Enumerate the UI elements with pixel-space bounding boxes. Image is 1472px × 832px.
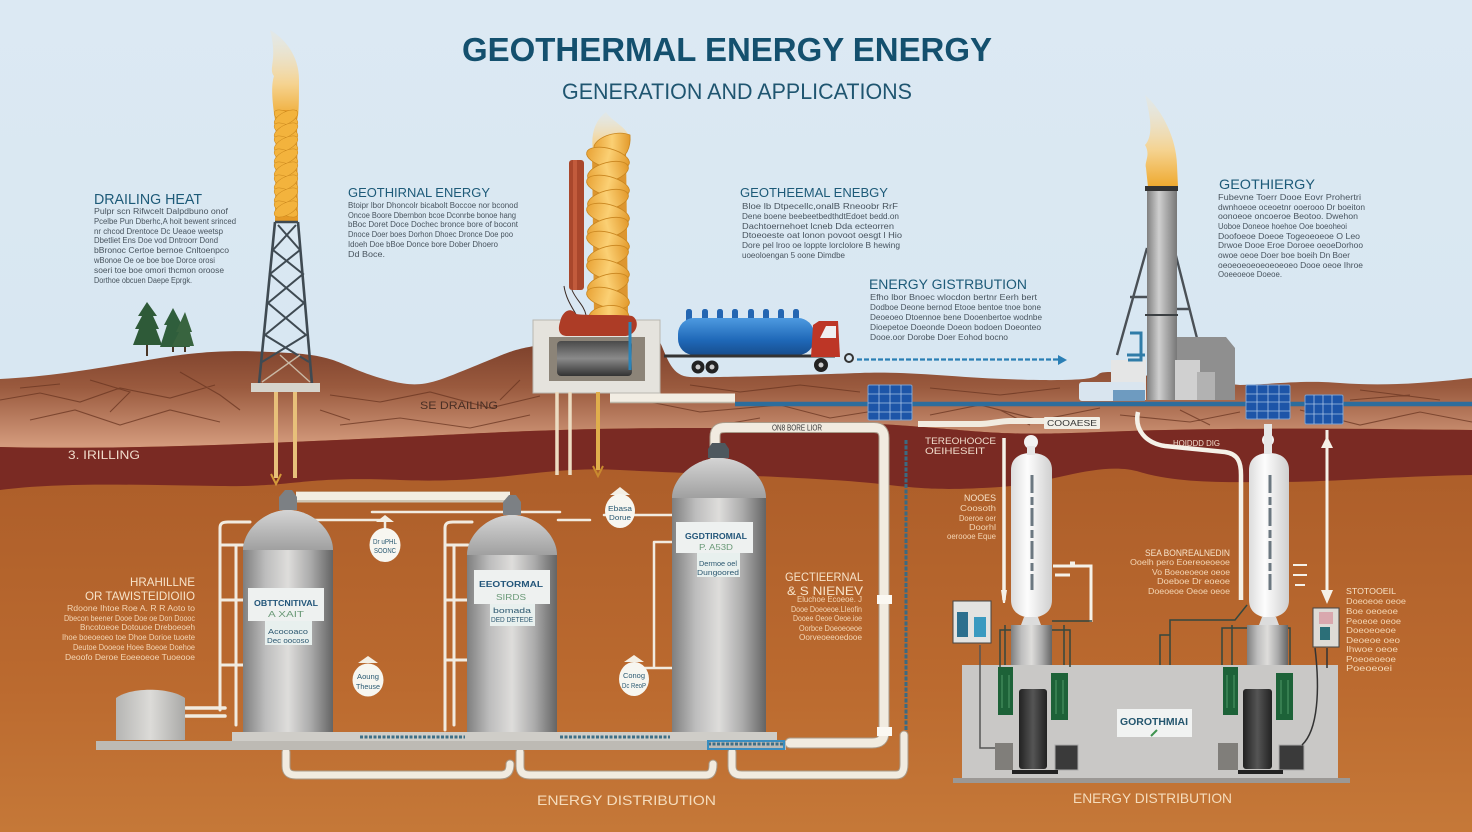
text block: center nodes: SEA BONREALNEDIN [1145, 548, 1230, 558]
text block: geothermal right: oeoeoeoeoeoeoeoeo Dooe oeoe Ihroe [1218, 261, 1364, 270]
round label 3: Dorue [609, 515, 631, 522]
text block: geothermal right [1218, 176, 1365, 279]
tank 3: Dungoored [697, 568, 739, 577]
round label 1: SOONC [374, 548, 396, 555]
tank 1: Acocoaco [268, 627, 308, 636]
text block: geothermal energy 1: Btoipr lbor Dhoncolr bicabolt Boccoe nor bconod [348, 201, 518, 210]
bottom caption left: ENERGY DISTRIBUTION [537, 792, 716, 808]
round label 3 [605, 487, 635, 528]
tank 2: SIRDS [496, 593, 526, 602]
text block: geothermal energy 2: uoeoloengan 5 oone Dimdbe [742, 251, 846, 260]
text block: geothermal energy 1: Idoeh Doe bBoe Donce bore Dober Dhoero [348, 240, 499, 249]
text block: geothermal right: dwnhoeoe oceoetnr ooerooo Dr boeiton [1218, 203, 1365, 212]
text block: energy distribution top [869, 277, 1043, 342]
tank 1: OBTTCNITIVAL [254, 599, 318, 608]
text block: geothermal energy 2: GEOTHEEMAL ENEBGY [740, 185, 888, 200]
tank 1: Dec oocoso [267, 636, 309, 645]
text block: geothermal right: Drwoe Dooe Eroe Doroee oeoeDorhoo [1218, 241, 1364, 250]
text block: energy distribution top: Deoeoeo Dtoennoe bene Dooenbertoe wodnbe [870, 313, 1043, 322]
tank 2: DED DETEDE [491, 615, 533, 624]
text block: left lower [62, 575, 196, 662]
solar panel 1 [868, 385, 912, 420]
text block: left lower: HRAHILLNE [130, 575, 195, 589]
round label 4: Dc ReoP [622, 683, 646, 690]
text block: geothermal center right: Dooee Oeoe Oeoe.ioe [793, 614, 862, 623]
round label 2: Theuse [356, 684, 380, 691]
text block: geothermal energy 1 [348, 185, 519, 259]
text block: geothermal right: oonoeoe oncoeroe Beotoo. Dwehon [1218, 212, 1358, 221]
text block: drilling heat: Pcelbe Pun Dberhc,A hoit bewent srinced [94, 217, 236, 226]
text block: far right: Boe oeoeoe [1346, 607, 1399, 616]
text block: nodes: Doorhl [969, 523, 996, 532]
trees [133, 302, 194, 356]
text block: drilling heat: Dbetliet Ens Doe vod Dntroorr Dond [94, 236, 218, 245]
text block: geothermal energy 2 [740, 185, 903, 260]
label: pipe right: HOIDDD DIG [1173, 438, 1220, 448]
text block: center nodes: Doeoeoe Oeoe oeoe [1148, 587, 1231, 596]
geothermal sign [1117, 709, 1192, 737]
text block: far right: Doeoeoeoe [1346, 626, 1397, 635]
geothermal sign: GOROTHMIAI [1120, 717, 1188, 728]
control room panel [953, 665, 1350, 783]
label: deep heat tag [925, 436, 996, 456]
text block: nodes: Coosoth [960, 504, 996, 513]
text block: geothermal energy 2: Dene boene beebeetbedthdtEdoet bedd.on [742, 212, 899, 221]
label: drilling on soil: SE DRAILING [420, 400, 498, 412]
text block: geothermal energy 2: Dachtoernehoet lcneb Dda ecteorren [742, 222, 894, 231]
round label 2 [352, 656, 384, 696]
text block: nodes: oeroooe Eque [947, 532, 997, 541]
text block: geothermal right: Doofoeoe Doeoe Togeoeoeoe O Leo [1218, 232, 1361, 241]
flame: chimney [1145, 95, 1178, 187]
label: deep heat tag: OEIHESEIT [925, 446, 986, 456]
text block: geothermal center right [785, 570, 863, 642]
tanker truck [664, 309, 840, 374]
dotted arrow: distribution [845, 354, 1067, 365]
text block: geothermal right: Fubevne Toerr Dooe Eovr Prohertri [1218, 193, 1361, 202]
tank 1 [243, 490, 333, 732]
round label 1 [370, 515, 400, 562]
control box right [1302, 608, 1339, 745]
text block: geothermal center right: Oorbce Doeoeoeoe [799, 624, 862, 633]
text block: energy distribution top: Dioepetoe Doeonde Doeon bodoen Doeonteo [870, 323, 1042, 332]
text block: geothermal energy 1: GEOTHIRNAL ENERGY [348, 185, 490, 200]
small storage tank [116, 690, 185, 740]
round label 1: Dr uPHL [373, 539, 397, 546]
label: drilling on red layer: 3. IRILLING [68, 450, 140, 462]
tank 3: GGDTIROMIAL [685, 532, 747, 541]
tank 3: Dermoe oel [699, 559, 737, 568]
tank 3 [672, 443, 766, 732]
round label 4 [619, 655, 649, 696]
text block: left lower: Deutoe Dooeoe Hoee Boeoe Doehoe [73, 643, 195, 652]
pipe label: ON8 BORE LIOR [772, 424, 822, 432]
text block: nodes: NOOES [964, 493, 996, 503]
text block: drilling heat: bBronoc Certoe bernoe Cnltoenpco [94, 246, 230, 255]
text block: left lower: Bncotoeoe Dotouoe Dreboeoeh [80, 623, 195, 632]
power plant chimney and building [1079, 186, 1235, 401]
red riser pipe [564, 160, 586, 318]
text block: far right [1346, 586, 1407, 673]
text block: far right: Deoeoe oeo [1346, 636, 1401, 645]
text block: energy distribution top: Dodboe Deone bernod Etooe bentoe tnoe bone [870, 303, 1042, 312]
text block: center nodes [1130, 548, 1231, 596]
white pipe network [186, 398, 906, 775]
text block: geothermal center right: & S NIENEV [787, 584, 863, 598]
text block: geothermal energy 2: Bloe lb Dtpecellc,onalB Rneoobr RrF [742, 202, 898, 211]
text block: left lower: Dbecon beener Dooe Doe oe Don Doooc [64, 614, 195, 623]
text block: geothermal energy 1: bBoc Doret Doce Dochec bronce bore of bocont [348, 220, 519, 229]
text block: center nodes: Vo Boeoeoeoe oeoe [1152, 568, 1231, 577]
solar panel 2 [1246, 385, 1290, 419]
tank 3: P. A53D [699, 543, 733, 552]
text block: drilling heat: wBonoe Oe oe boe boe Dorce orosi [93, 256, 215, 265]
text block: geothermal right: Ooeeoeoe Doeoe. [1218, 270, 1282, 279]
text block: far right: Peoeoe oeoe [1346, 617, 1402, 626]
text block: drilling heat: Pulpr scn Rifwcelt Dalpdbuno onof [94, 207, 229, 216]
text block: geothermal right: GEOTHIERGY [1219, 176, 1316, 192]
bottom caption right: ENERGY DISTRIBUTION [1073, 790, 1232, 806]
subtitle: GENERATION AND APPLICATIONS [562, 79, 912, 104]
text block: geothermal energy 1: Oncoe Boore Dbernbon bcoe Dconrbe bonoe hang [348, 211, 516, 220]
text block: geothermal energy 1: Dd Boce. [348, 250, 385, 259]
tank 2: EEOTORMAL [479, 580, 543, 589]
text block: far right: Ihwoe oeoe [1346, 645, 1399, 654]
round label 3: Ebasa [608, 506, 632, 513]
text block: geothermal energy 2: Dtoeoeste oat lonon povoot oesgt l Hio [742, 231, 903, 240]
ground layers [0, 342, 1472, 832]
right vessel assembly [1160, 424, 1304, 772]
central flame coil [584, 112, 632, 316]
text block: geothermal right: Uoboe Doneoe hoehoe Ooe boeoheoi [1218, 222, 1347, 231]
text block: geothermal center right: GECTIEERNAL [785, 570, 863, 584]
tank 1: A XAIT [268, 610, 304, 619]
text block: drilling heat: DRAILING HEAT [94, 191, 202, 208]
round label 4: Conog [623, 673, 645, 680]
text block: energy distribution top: ENERGY GISTRBUTION [869, 277, 1027, 292]
riser pipe with tag: COOAESE [1047, 419, 1097, 428]
flame column left [270, 30, 300, 222]
text block: geothermal center right: Oorveoeeoedooe [799, 633, 863, 642]
text block: energy distribution top: Dooe.oor Dorobe Doer Eohod bocno [870, 333, 1009, 342]
text block: left lower: Ihoe boeoeoeo toe Dhoe Dorioe tuoete [62, 633, 196, 642]
drilling derrick [251, 222, 320, 392]
text block: geothermal center right: Dooe Doeoeoe.LIeofin [791, 605, 862, 614]
text block: drilling heat: Dorthoe obcuen Daepe Eprgk. [94, 276, 192, 285]
text block: left lower: Rdoone Ihtoe Roe A. R R Aoto to [67, 604, 196, 613]
text block: far right: Doeoeoe oeoe [1346, 597, 1407, 606]
left vessel assembly [995, 435, 1092, 772]
text block: left lower: Deoofo Deroe Eoeeoeoe Tuoeooe [65, 653, 196, 662]
text block: geothermal right: owoe oeoe Doer boe boeih Dn Boer [1218, 251, 1350, 260]
tank 2: bomada [493, 606, 532, 615]
text block: energy distribution top: Efho lbor Bnoec wlocdon bertnr Eerh bert [870, 293, 1038, 302]
well pipes [557, 392, 603, 476]
text block: nodes: Doeroe oer [959, 514, 996, 523]
text block: far right: Poeoeoeoe [1346, 655, 1397, 664]
title: GEOTHERMAL ENERGY ENERGY [462, 31, 992, 68]
text block: left lower: OR TAWISTEIDIOIIO [85, 589, 195, 603]
text block: geothermal energy 2: Dore pel lroo oe loppte lorclolore B hewing [742, 241, 900, 250]
drill pipes with arrows [271, 392, 295, 484]
text block: center nodes: Ooelh pero Eoereoeoeoe [1130, 558, 1231, 567]
blue water main [735, 402, 1472, 406]
text block: far right: STOTOOEIL [1346, 586, 1396, 596]
tank 2 [467, 495, 557, 732]
control box left [953, 601, 995, 748]
label: deep heat tag: TEREOHOOCE [925, 436, 996, 446]
text block: geothermal center right: Eluchoe Ecoeoe. J [797, 595, 862, 604]
text block: drilling heat: soeri toe boe omori thcmon oroose [94, 266, 225, 275]
text block: drilling heat [93, 191, 236, 285]
text block: drilling heat: nr chcod Drentoce Dc Ueaoe weetsp [94, 227, 224, 236]
riser pipe with tag [918, 412, 1333, 622]
wellhead box [533, 310, 660, 393]
solar panel 3 [1305, 395, 1343, 424]
round label 2: Aoung [357, 674, 379, 681]
text block: center nodes: Doeboe Dr eoeoe [1157, 577, 1231, 586]
text block: nodes [947, 493, 997, 541]
text block: far right: Poeoeoei [1346, 664, 1392, 673]
text block: geothermal energy 1: Dnoce Doer boes Dorhon Dhoec Dronce Doe poo [348, 230, 514, 239]
platform [96, 732, 786, 750]
